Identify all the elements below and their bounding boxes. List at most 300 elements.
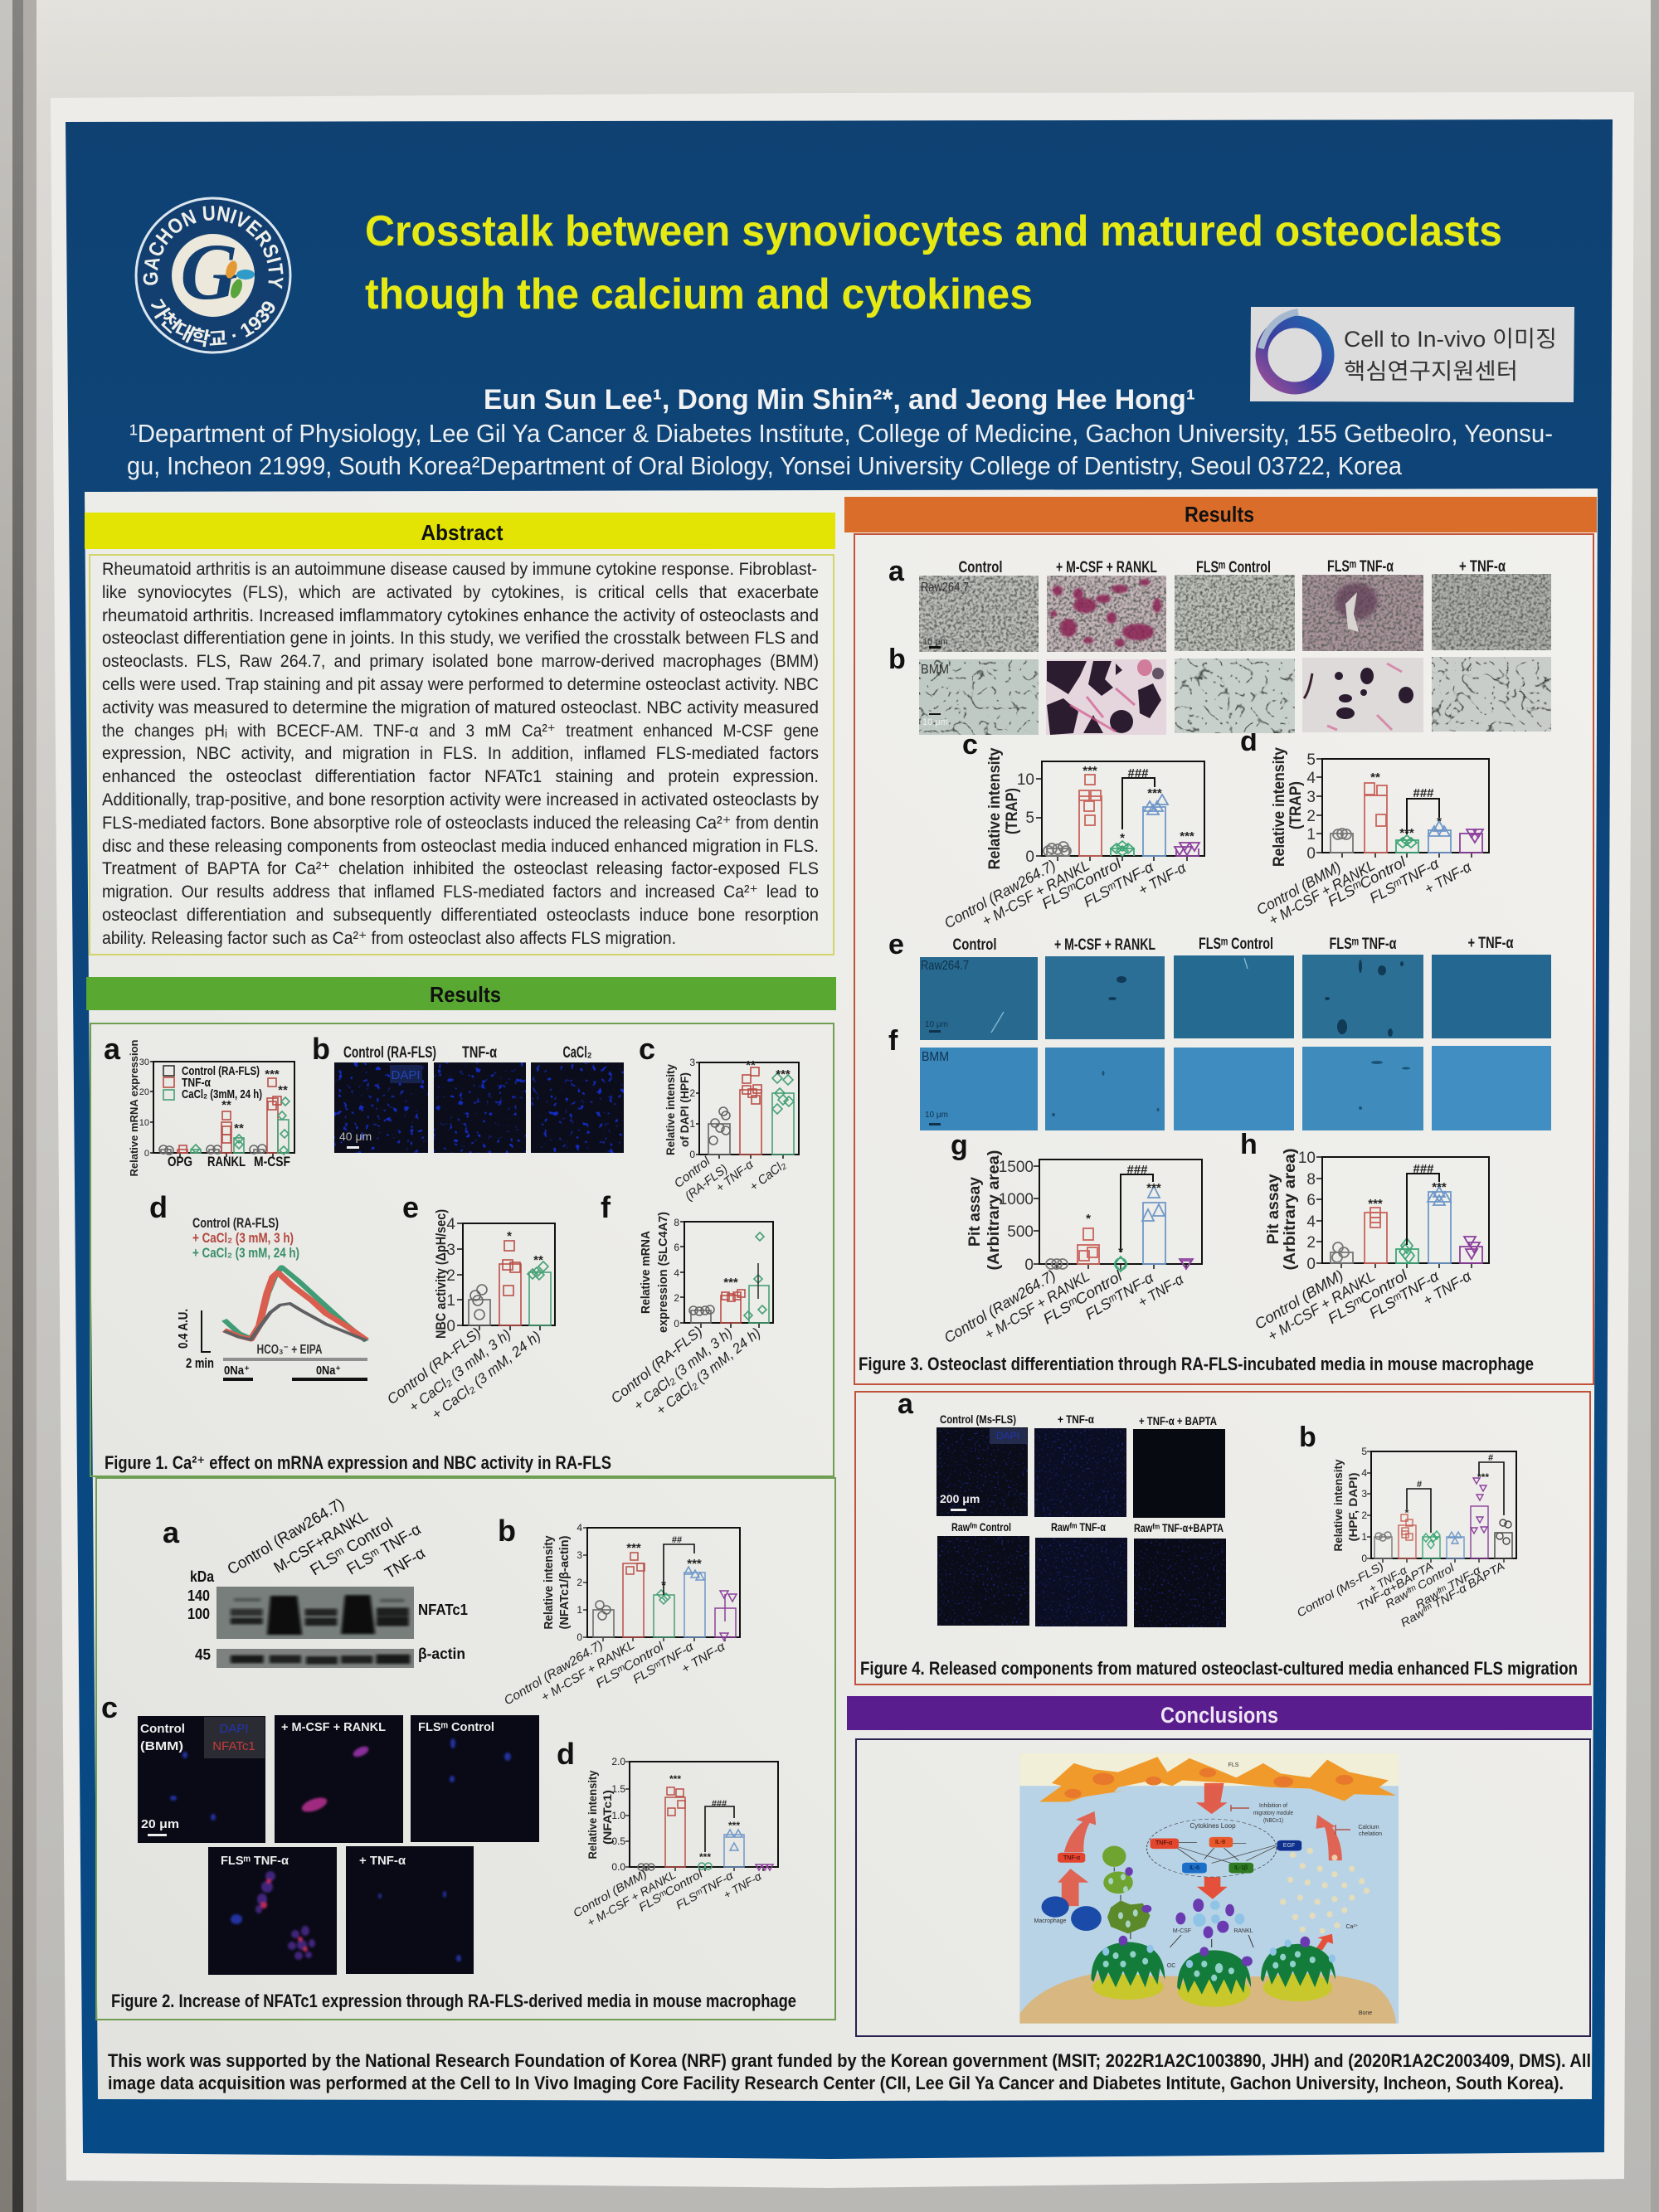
chart d: TRAP intensity BMM: *	[1437, 814, 1442, 829]
abstract text block	[90, 555, 834, 955]
heading: Conclusions: Conclusions	[1160, 1703, 1278, 1728]
chart a: relative mRNA expression: ***	[265, 1067, 280, 1082]
micrographs a: TRAP staining Raw264.7	[919, 574, 1551, 652]
logo: Cell to In-vivo imaging core facility	[1250, 307, 1574, 402]
chart b: relative intensity HPF DAPI: (HPF, DAPI)	[1346, 1473, 1360, 1541]
chart b: NFATc1/β-actin: ##	[672, 1535, 682, 1545]
panel letters: f	[601, 1190, 611, 1224]
column headers a: + TNF-α	[1459, 558, 1506, 576]
authors: Eun Sun Lee¹, Dong Min Shin²*, and Jeong Hee Hong¹	[484, 384, 1195, 416]
schematic labels: (NBCn1)	[1263, 1818, 1283, 1824]
schematic labels: Inhibition of	[1259, 1803, 1287, 1809]
panel: conclusions schematic	[856, 1739, 1590, 2036]
chart f: SLC4A7 mRNA expression	[608, 1212, 773, 1418]
schematic labels: IL-1β	[1234, 1865, 1248, 1871]
column headers a: Control	[959, 559, 1002, 576]
abstract text block: ability. Releasing factor such as Ca²⁺ from osteoclast also affects FLS migration.	[102, 929, 676, 948]
chart c: relative intensity of DAPI: (RA-FLS)	[683, 1162, 730, 1203]
panel letters: d	[1240, 726, 1258, 757]
chart a: relative mRNA expression: **	[278, 1083, 288, 1097]
chart c: relative intensity of DAPI: + TNF-α	[713, 1158, 757, 1195]
micrographs a: FLS migration: Rawᶠᵐ TNF-α	[1051, 1520, 1106, 1534]
chart b: NFATc1/β-actin: FLSᵐControl	[593, 1639, 667, 1691]
chart d: NFATc1 intensity: ***	[728, 1820, 740, 1831]
abstract text block: disc and these releasing components from osteoclast media induced enhanced migration in FLS.	[102, 837, 819, 856]
chart e: NBC activity: 2	[446, 1267, 455, 1285]
chart f: SLC4A7 mRNA expression: 6	[674, 1242, 679, 1253]
chart b: relative intensity HPF DAPI: 0	[1361, 1553, 1367, 1564]
abstract text block: enhanced the osteoclast differentiation factor NFATc1 staining and protein expression.	[102, 767, 819, 786]
chart b: relative intensity HPF DAPI: Relative intensity	[1331, 1459, 1345, 1551]
western blot a: kDa	[190, 1568, 215, 1585]
chart d: TRAP intensity BMM: Relative intensity	[1271, 747, 1288, 867]
chart b: relative intensity HPF DAPI: TNF-α+BAPTA	[1355, 1559, 1435, 1613]
chart f: SLC4A7 mRNA expression: Control (RA-FLS)	[608, 1323, 706, 1407]
micrographs c: NFATc1 immunofluorescence: (BMM)	[140, 1739, 183, 1753]
icon: Gachon University seal: G	[180, 227, 238, 316]
chart b: relative intensity HPF DAPI: 3	[1361, 1488, 1367, 1500]
chart g: pit assay Raw264.7: (Arbitrary area)	[985, 1150, 1003, 1271]
chart b: relative intensity HPF DAPI: + TNF-α	[1366, 1563, 1409, 1596]
heading: Abstract	[85, 513, 835, 549]
schematic labels: OC	[1167, 1963, 1175, 1969]
panel: Figure 2	[96, 1478, 835, 2020]
chart f: SLC4A7 mRNA expression: 0	[674, 1318, 679, 1330]
panel letters: e	[888, 929, 904, 960]
column headers a	[959, 558, 1506, 576]
schematic labels	[1034, 1762, 1382, 2016]
chart c: TRAP intensity Raw264.7: Control (Raw264.7)	[941, 857, 1058, 931]
chart d: NFATc1 intensity	[571, 1756, 778, 1929]
micrographs c: NFATc1 immunofluorescence: Control	[140, 1722, 185, 1736]
chart a: relative mRNA expression: 30	[139, 1057, 149, 1067]
chart a: relative mRNA expression: M-CSF	[254, 1154, 290, 1169]
chart e: NBC activity: Control (RA-FLS)	[384, 1325, 484, 1407]
panel letters: h	[1240, 1129, 1258, 1160]
chart e: NBC activity	[384, 1209, 555, 1422]
chart h: pit assay BMM: Pit assay	[1265, 1174, 1282, 1244]
panel letters: a	[163, 1515, 180, 1549]
chart b: NFATc1/β-actin: ***	[687, 1557, 702, 1571]
chart a: relative mRNA expression	[128, 1039, 294, 1176]
panel: Figure 3	[854, 534, 1593, 1384]
micrographs f: pit assay BMM: 10 μm	[925, 1111, 948, 1120]
chart h: pit assay BMM: 6	[1306, 1192, 1316, 1209]
column headers e: + TNF-α	[1468, 935, 1514, 952]
western blot a: 140	[187, 1587, 210, 1604]
chart b: NFATc1/β-actin: Relative intensity	[542, 1535, 556, 1629]
micrographs c: NFATc1 immunofluorescence: 20 μm	[141, 1817, 179, 1831]
chart d: NBC fluorescence traces: 0Na⁺	[316, 1364, 341, 1378]
chart e: NBC activity: *	[507, 1229, 512, 1243]
western blot a: NFATc1	[418, 1602, 468, 1618]
chart d: TRAP intensity BMM: + TNF-α	[1422, 858, 1475, 897]
chart h: pit assay BMM: 4	[1306, 1213, 1316, 1231]
chart b: relative intensity HPF DAPI: Rawᶠᵐ Control	[1383, 1560, 1457, 1611]
chart a: relative mRNA expression: OPG	[168, 1154, 192, 1169]
chart c: TRAP intensity Raw264.7: + TNF-α	[1136, 859, 1190, 899]
schematic labels: Calcium	[1358, 1825, 1379, 1830]
chart g: pit assay Raw264.7: 500	[1007, 1223, 1034, 1241]
chart h: pit assay BMM: + TNF-α	[1420, 1267, 1475, 1309]
heading: Results (green)	[86, 977, 836, 1010]
chart f: SLC4A7 mRNA expression: + CaCl₂ (3 mM, 3 h)	[630, 1325, 736, 1414]
chart d: NBC fluorescence traces: Control (RA-FLS)	[192, 1215, 279, 1231]
chart e: NBC activity: **	[533, 1253, 543, 1267]
panel letters	[101, 1514, 575, 1771]
micrographs b: DAPI migration: TNF-α	[462, 1044, 497, 1062]
micrographs a: FLS migration: Control (Ms-FLS)	[940, 1412, 1016, 1426]
chart c: TRAP intensity Raw264.7: 10	[1017, 771, 1034, 789]
panel letters: c	[101, 1690, 118, 1724]
chart d: NBC fluorescence traces: + CaCl₂ (3 mM, 3 h)	[192, 1230, 294, 1246]
schematic labels: migratory module	[1253, 1811, 1293, 1816]
chart a: relative mRNA expression: 0	[144, 1149, 149, 1159]
abstract text block: osteoclasts. FLS, Raw 264.7, and primary isolated bone marrow-derived macrophages (BMM)	[102, 652, 819, 671]
chart a: relative mRNA expression: **	[234, 1121, 244, 1135]
chart b: relative intensity HPF DAPI: #	[1417, 1480, 1422, 1490]
micrographs a: FLS migration: DAPI	[996, 1430, 1019, 1441]
chart c: TRAP intensity Raw264.7: 0	[1025, 848, 1034, 866]
chart e: NBC activity: + CaCl₂ (3 mM, 3 h)	[406, 1326, 513, 1416]
chart a: relative mRNA expression: 10	[139, 1118, 149, 1128]
main white content panel	[85, 489, 1598, 2101]
abstract text block: cells were used. Trap staining and pit assay were performed to determine osteoclast activity. NBC	[102, 675, 819, 694]
abstract text block: osteoclast differentiation and subsequently differentiated osteoclasts induce bone resorption	[102, 906, 819, 925]
chart legend: TNF-α	[182, 1076, 212, 1090]
chart d: NFATc1 intensity: 0.0	[611, 1861, 625, 1873]
panel letters: a	[888, 556, 905, 587]
micrographs b: DAPI migration: CaCl₂	[562, 1044, 592, 1062]
western blot a: 45	[195, 1646, 211, 1663]
column headers a: FLSᵐ TNF-α	[1327, 558, 1394, 576]
chart b: NFATc1/β-actin: 1	[577, 1604, 582, 1616]
micrographs a: FLS migration: Rawᶠᵐ TNF-α+BAPTA	[1134, 1521, 1224, 1534]
panel letters: a	[898, 1388, 914, 1420]
title	[365, 207, 1502, 318]
affiliations: ¹Department of Physiology, Lee Gil Ya Cancer & Diabetes Institute, College of Medicine, Gachon University, 155 Getbeolro, Yeonsu-	[129, 419, 1553, 448]
micrographs e: pit assay Raw264.7	[920, 955, 1551, 1040]
chart e: NBC activity: + CaCl₂ (3 mM, 24 h)	[429, 1328, 543, 1422]
abstract text block: osteoclast differentiation gene in joints. In this study, we verified the crosstalk between FLS and	[102, 629, 819, 648]
chart d: NFATc1 intensity: 0.5	[611, 1835, 625, 1847]
chart b: NFATc1/β-actin: FLSᵐTNF-α	[630, 1640, 696, 1687]
western blot a: FLSᵐ Control	[308, 1515, 396, 1579]
chart f: SLC4A7 mRNA expression: + CaCl₂ (3 mM, 24 h)	[653, 1325, 764, 1418]
chart d: NBC fluorescence traces: HCO₃⁻ + EIPA	[257, 1343, 323, 1357]
chart c: TRAP intensity Raw264.7: Relative intensity	[986, 747, 1004, 869]
chart b: NFATc1/β-actin: (NFATc1/β-actin)	[557, 1536, 572, 1629]
panel letters: a	[104, 1032, 121, 1066]
chart d: TRAP intensity BMM: + M-CSF + RANKL	[1266, 857, 1378, 929]
micrographs e: pit assay Raw264.7: 10 μm	[925, 1020, 948, 1029]
chart c: relative intensity of DAPI: ***	[776, 1067, 791, 1082]
chart h: pit assay BMM: ***	[1368, 1197, 1383, 1211]
schematic labels: Macrophage	[1034, 1918, 1067, 1924]
column headers a: + M-CSF + RANKL	[1056, 559, 1157, 576]
caption: Figure 3: Figure 3. Osteoclast differentiation through RA-FLS-incubated media in mouse macrophage	[859, 1354, 1534, 1374]
chart c: relative intensity of DAPI	[664, 1057, 799, 1203]
chart c: TRAP intensity Raw264.7: FLSᵐTNF-α	[1081, 858, 1157, 911]
micrographs c: NFATc1 immunofluorescence: NFATc1	[212, 1739, 255, 1753]
chart g: pit assay Raw264.7: *	[1086, 1212, 1091, 1226]
abstract text block: Treatment of BAPTA for Ca²⁺ chelation inhibited the osteoclast releasing factor-exposed FLS	[102, 859, 819, 878]
chart b: relative intensity HPF DAPI: Rawᶠᵐ TNF-α BAPTA	[1399, 1559, 1506, 1630]
chart b: NFATc1/β-actin: + TNF-α	[679, 1640, 727, 1676]
chart c: relative intensity of DAPI: + CaCl₂	[747, 1158, 789, 1194]
abstract text block: expression, NBC activity, and migration in FLS. In addition, inflamed FLS-mediated factors	[102, 744, 819, 763]
panel letters: g	[951, 1130, 968, 1161]
chart b: NFATc1/β-actin: *	[661, 1578, 666, 1592]
micrographs a: TRAP staining Raw264.7: Raw264.7	[921, 581, 969, 595]
chart f: SLC4A7 mRNA expression: ***	[723, 1276, 738, 1290]
panel letters	[898, 1388, 1316, 1453]
chart f: SLC4A7 mRNA expression: 2	[674, 1292, 679, 1304]
chart d: TRAP intensity BMM	[1253, 747, 1489, 929]
chart d: TRAP intensity BMM: **	[1370, 771, 1380, 785]
micrographs a: FLS migration: 200 μm	[940, 1492, 980, 1505]
chart h: pit assay BMM: ***	[1432, 1180, 1447, 1194]
chart g: pit assay Raw264.7: + M-CSF + RANKL	[981, 1267, 1092, 1344]
micrographs a: FLS migration: Rawᶠᵐ Control	[951, 1520, 1011, 1534]
chart b: NFATc1/β-actin: ***	[626, 1541, 641, 1555]
chart c: relative intensity of DAPI: 2	[689, 1087, 695, 1099]
panel letters	[888, 556, 1258, 1161]
micrographs b: DAPI migration: DAPI	[391, 1068, 421, 1082]
chart b: NFATc1/β-actin: 2	[577, 1577, 582, 1588]
column headers e: FLSᵐ TNF-α	[1329, 936, 1397, 953]
chart h: pit assay BMM: Control (BMM)	[1252, 1266, 1346, 1333]
chart a: relative mRNA expression: **	[221, 1098, 231, 1112]
icon: Gachon University seal: 가천대학교 · 1939	[151, 299, 275, 347]
chart g: pit assay Raw264.7: FLSᵐTNF-α	[1082, 1269, 1157, 1323]
chart d: TRAP intensity BMM: 2	[1306, 808, 1316, 825]
panel letters: b	[1299, 1422, 1316, 1453]
chart d: NFATc1 intensity: + TNF-α	[721, 1869, 764, 1902]
chart e: NBC activity: NBC activity (ΔpH/sec)	[433, 1209, 449, 1339]
chart b: relative intensity HPF DAPI: 5	[1361, 1446, 1367, 1457]
micrographs a: FLS migration	[937, 1412, 1226, 1627]
chart b: relative intensity HPF DAPI: Rawᶠᵐ TNF-α	[1413, 1563, 1483, 1612]
micrographs c: NFATc1 immunofluorescence: + M-CSF + RANKL	[281, 1720, 386, 1734]
chart b: NFATc1/β-actin: 3	[577, 1549, 582, 1561]
heading: Results (orange)	[844, 497, 1597, 532]
chart c: relative intensity of DAPI: **	[746, 1058, 756, 1072]
chart c: relative intensity of DAPI: 1	[689, 1118, 695, 1130]
schematic labels: FLS	[1228, 1762, 1239, 1768]
logo: Cell to In-vivo imaging core facility: Cell to In-vivo 이미징	[1344, 327, 1557, 352]
chart b: relative intensity HPF DAPI: Control (Ms-FLS)	[1294, 1559, 1385, 1620]
micrographs b: TRAP staining BMM: 10 μm	[922, 717, 948, 727]
affiliations: gu, Incheon 21999, South Korea²Department of Oral Biology, Yonsei University College of Dentistry, Seoul 03722, Korea	[127, 451, 1403, 480]
micrographs b: TRAP staining BMM	[919, 657, 1551, 735]
chart b: NFATc1/β-actin: 4	[577, 1522, 582, 1534]
chart b: relative intensity HPF DAPI: ***	[1477, 1471, 1489, 1483]
schematic labels: TNF-α	[1063, 1855, 1080, 1861]
chart legend: CaCl₂ (3mM, 24 h)	[182, 1087, 262, 1101]
chart c: relative intensity of DAPI: of DAPI (HPF)	[678, 1072, 691, 1147]
affiliations	[127, 419, 1553, 480]
chart c: TRAP intensity Raw264.7: ###	[1127, 766, 1149, 780]
panel letters: c	[962, 729, 978, 761]
chart c: TRAP intensity Raw264.7: ***	[1082, 764, 1097, 778]
chart a: relative mRNA expression: RANKL	[207, 1154, 246, 1169]
western blot a: Control (Raw264.7)	[225, 1495, 348, 1578]
chart d: NFATc1 intensity: + M-CSF + RANKL	[585, 1868, 679, 1929]
western blot a: M-CSF+RANKL	[271, 1507, 371, 1577]
chart d: TRAP intensity BMM: FLSᵐTNF-α	[1367, 855, 1443, 907]
panel letters: b	[888, 644, 906, 675]
chart c: TRAP intensity Raw264.7: (TRAP)	[1004, 788, 1021, 834]
chart c: TRAP intensity Raw264.7: + M-CSF + RANKL	[979, 857, 1092, 930]
chart d: NFATc1 intensity: ***	[699, 1851, 711, 1863]
chart e: NBC activity: 3	[446, 1242, 455, 1259]
chart h: pit assay BMM: FLSᵐControl	[1325, 1266, 1411, 1327]
chart h: pit assay BMM: + M-CSF + RANKL	[1265, 1267, 1378, 1344]
caption: Figure 1: Figure 1. Ca²⁺ effect on mRNA expression and NBC activity in RA-FLS	[105, 1452, 611, 1473]
chart d: NBC fluorescence traces	[177, 1215, 367, 1381]
micrographs f: pit assay BMM	[920, 1046, 1551, 1130]
chart b: relative intensity HPF DAPI: *	[1405, 1507, 1409, 1519]
chart d: TRAP intensity BMM: 1	[1306, 826, 1316, 843]
abstract text block: FLS-mediated factors. Bone absorptive role of osteoclasts induced the releasing Ca²⁺ from dentin	[102, 814, 819, 833]
panel letters: e	[402, 1190, 419, 1224]
chart h: pit assay BMM: 10	[1298, 1150, 1316, 1167]
chart d: NFATc1 intensity: ###	[712, 1799, 727, 1809]
chart b: relative intensity HPF DAPI	[1294, 1446, 1516, 1630]
micrographs c: NFATc1 immunofluorescence: + TNF-α	[359, 1854, 406, 1868]
title: though the calcium and cytokines	[365, 270, 1033, 318]
chart b: relative intensity HPF DAPI: 1	[1361, 1531, 1367, 1543]
chart g: pit assay Raw264.7: 1500	[999, 1159, 1034, 1176]
chart d: TRAP intensity BMM: (TRAP)	[1287, 781, 1305, 829]
chart c: TRAP intensity Raw264.7	[941, 747, 1204, 931]
schematic labels: IL-8	[1215, 1840, 1225, 1845]
chart h: pit assay BMM: ###	[1413, 1162, 1434, 1176]
schematic labels: TNF-α	[1155, 1840, 1172, 1846]
panel letters: b	[498, 1514, 516, 1548]
column headers a: FLSᵐ Control	[1196, 559, 1271, 576]
abstract text block: like synoviocytes (FLS), which are activated by cytokines, is critical cells that exacerbate	[102, 583, 819, 602]
panel letters: f	[888, 1025, 898, 1057]
chart d: NFATc1 intensity: 2.0	[611, 1756, 625, 1767]
chart b: NFATc1/β-actin	[502, 1522, 740, 1708]
chart g: pit assay Raw264.7: + TNF-α	[1135, 1271, 1187, 1310]
western blot a: 100	[187, 1606, 210, 1622]
chart g: pit assay Raw264.7: 1000	[999, 1191, 1034, 1208]
panel letters: c	[639, 1032, 655, 1066]
chart h: pit assay BMM: FLSᵐTNF-α	[1366, 1267, 1443, 1322]
schematic labels: IL-6	[1190, 1865, 1199, 1871]
micrographs a: FLS migration: + TNF-α + BAPTA	[1139, 1414, 1217, 1427]
western blot a: β-actin	[418, 1646, 465, 1662]
chart c: relative intensity of DAPI: 0	[689, 1149, 695, 1160]
chart g: pit assay Raw264.7: FLSᵐControl	[1040, 1267, 1126, 1328]
micrographs c: NFATc1 immunofluorescence: FLSᵐ Control	[418, 1720, 494, 1734]
schematic illustration	[1019, 1753, 1399, 2024]
micrographs f: pit assay BMM: BMM	[922, 1050, 949, 1064]
chart g: pit assay Raw264.7: *	[1118, 1245, 1123, 1259]
chart a: relative mRNA expression: Relative mRNA expression	[128, 1039, 140, 1176]
heading: Conclusions	[847, 1696, 1592, 1730]
chart c: relative intensity of DAPI: 3	[689, 1057, 695, 1068]
chart h: pit assay BMM: 0	[1306, 1256, 1316, 1273]
chart d: NBC fluorescence traces: 0Na⁺	[224, 1364, 250, 1378]
micrographs c: NFATc1 immunofluorescence: FLSᵐ TNF-α	[221, 1854, 289, 1868]
micrographs c: NFATc1 immunofluorescence	[138, 1715, 539, 1975]
western blot a	[187, 1495, 468, 1668]
chart d: NFATc1 intensity: Control (BMM)	[571, 1867, 649, 1920]
chart b: NFATc1/β-actin: 0	[577, 1631, 582, 1643]
chart c: TRAP intensity Raw264.7: ***	[1180, 829, 1194, 843]
chart h: pit assay BMM	[1252, 1148, 1489, 1344]
panel letters: d	[557, 1737, 575, 1771]
chart legend: Control (RA-FLS)	[182, 1064, 260, 1078]
chart b: relative intensity HPF DAPI: #	[1488, 1453, 1493, 1463]
schematic labels: RANKL	[1233, 1928, 1253, 1934]
abstract text block: rheumatoid arthritis. Increased imflammatory cytokines enhance the activity of osteoclasts and	[102, 606, 819, 625]
micrographs b: DAPI migration: Control (RA-FLS)	[343, 1044, 436, 1062]
western blot a: FLSᵐ TNF-α	[344, 1521, 424, 1578]
icon: Gachon University seal	[134, 197, 292, 353]
chart d: TRAP intensity BMM: Control (BMM)	[1253, 858, 1344, 918]
heading: Results (orange): Results	[1185, 502, 1254, 527]
column headers e: FLSᵐ Control	[1199, 936, 1273, 953]
chart g: pit assay Raw264.7: ***	[1146, 1181, 1161, 1195]
abstract text block: Additionally, trap-positive, and bone resorption activity were increased in activated osteoclasts by	[102, 790, 819, 809]
chart b: relative intensity HPF DAPI: 4	[1361, 1467, 1367, 1479]
chart c: relative intensity of DAPI: Relative intensity	[664, 1064, 677, 1155]
chart c: TRAP intensity Raw264.7: FLSᵐControl	[1039, 854, 1125, 912]
chart h: pit assay BMM: (Arbitrary area)	[1282, 1148, 1299, 1271]
micrographs b: DAPI migration: 40 μm	[339, 1130, 372, 1143]
chart d: TRAP intensity BMM: 3	[1306, 789, 1316, 806]
chart b: NFATc1/β-actin: Control (Raw264.7)	[502, 1638, 606, 1708]
chart f: SLC4A7 mRNA expression: expression (SLC4A7)	[656, 1212, 670, 1333]
panel letters	[104, 1032, 655, 1224]
schematic labels: Cytokines Loop	[1190, 1822, 1236, 1830]
chart b: NFATc1/β-actin: + M-CSF + RANKL	[539, 1638, 637, 1704]
chart f: SLC4A7 mRNA expression: Relative mRNA	[639, 1231, 653, 1314]
chart g: pit assay Raw264.7	[941, 1150, 1202, 1346]
chart d: TRAP intensity BMM: 0	[1306, 845, 1316, 863]
micrographs a: TRAP staining Raw264.7: 10 μm	[922, 637, 948, 647]
heading: Abstract: Abstract	[421, 520, 504, 545]
schematic labels: Ca²⁺	[1346, 1923, 1359, 1930]
chart c: TRAP intensity Raw264.7: *	[1120, 831, 1125, 845]
micrographs b: TRAP staining BMM: BMM	[921, 663, 949, 677]
chart a: relative mRNA expression: 20	[139, 1087, 149, 1097]
schematic labels: Bone	[1359, 2010, 1372, 2016]
panel: Figure 4	[855, 1388, 1590, 1685]
micrographs b: DAPI migration	[334, 1044, 624, 1153]
column headers e: + M-CSF + RANKL	[1054, 936, 1155, 954]
schematic labels: M-CSF	[1173, 1928, 1191, 1934]
icon: Gachon University seal: GACHON UNIVERSITY	[143, 206, 284, 289]
chart d: NFATc1 intensity: Relative intensity	[586, 1770, 599, 1860]
chart d: NBC fluorescence traces: 0.4 A.U.	[177, 1309, 191, 1349]
chart d: NFATc1 intensity: 1.5	[611, 1783, 625, 1795]
chart d: NBC fluorescence traces: 2 min	[186, 1355, 214, 1371]
panel letters: d	[149, 1190, 168, 1224]
abstract text block: migration. Our results address that inflamed FLS-mediated factors and increased Ca²⁺ lead to	[102, 882, 819, 902]
chart c: relative intensity of DAPI: Control	[672, 1154, 713, 1191]
chart f: SLC4A7 mRNA expression: 4	[674, 1267, 679, 1279]
chart h: pit assay BMM: 8	[1306, 1171, 1316, 1189]
chart c: TRAP intensity Raw264.7: 5	[1025, 809, 1034, 827]
header	[127, 197, 1574, 480]
caption: Figure 2: Figure 2. Increase of NFATc1 expression through RA-FLS-derived media in mouse macrophage	[111, 1991, 796, 2011]
